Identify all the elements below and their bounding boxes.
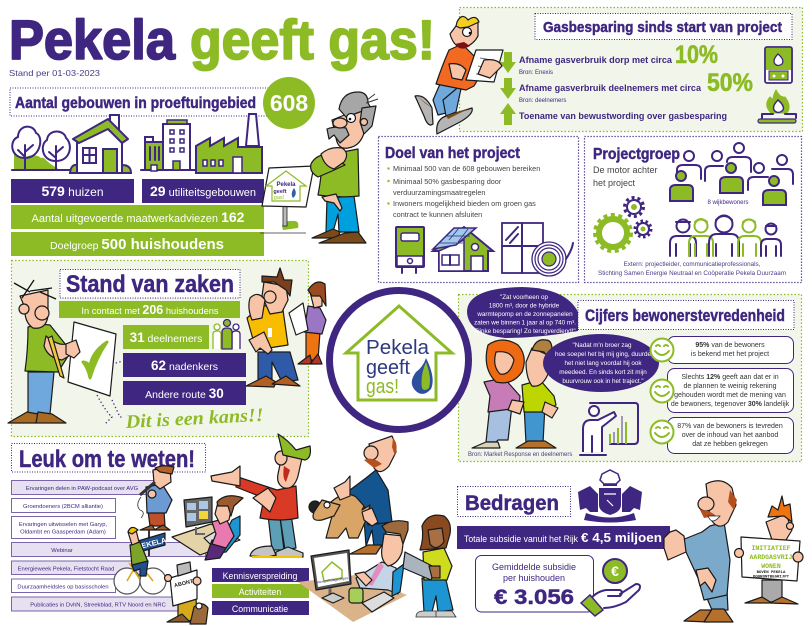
item: webinar: Webinar bbox=[51, 548, 73, 554]
icon: hand with euro coin bbox=[581, 559, 640, 616]
bar: maatwerkadviezen bbox=[11, 205, 264, 229]
goals list: Inwoners mogelijkheid bieden om groen gas bbox=[393, 199, 536, 208]
legend bars: Communicatie bbox=[232, 604, 288, 614]
character: man with newspaper and dog bbox=[164, 562, 208, 624]
character: running man reading paper bbox=[415, 16, 503, 134]
icon: trees and house bbox=[12, 115, 131, 173]
satisfaction 12: de bewoners, tegenover 30% landelijk bbox=[671, 401, 790, 408]
speech bubble 1: Flinke besparing! Zo terugverdiend!" bbox=[474, 328, 576, 335]
character: man with newspaper and dog: ABONT bbox=[174, 579, 195, 589]
caption residents: 8 wijkbewoners bbox=[707, 200, 749, 206]
logo badge: Pekela bbox=[366, 337, 430, 359]
item: groendoeners: Groendoeners (2BCM alliantie) bbox=[23, 504, 103, 510]
saving deelnemers: Afname gasverbruik deelnemers met circa bbox=[519, 83, 702, 94]
bar: doelgroep bbox=[11, 232, 264, 256]
caption external: Stichting Samen Energie Neutraal en Coöperatie Pekela Duurzaam bbox=[598, 270, 786, 277]
icon: house with solar panels bbox=[433, 227, 493, 271]
panel: cijfers bewonerstevredenheid bbox=[458, 287, 802, 462]
panel: bedragen bbox=[457, 470, 670, 616]
bar: huizen: 579 huizen bbox=[41, 183, 104, 199]
bar: nadenkers: 62 nadenkers bbox=[151, 358, 218, 373]
item: webinar bbox=[12, 542, 206, 556]
goals list: Minimaal 50% gasbesparing door bbox=[393, 177, 502, 186]
bar: nadenkers bbox=[123, 353, 246, 377]
character: man holding protest sign: INITIATIEF bbox=[751, 545, 791, 552]
bar: in contact bbox=[59, 301, 240, 318]
saving deelnemers bbox=[519, 69, 753, 104]
heading: Stand van zaken bbox=[66, 271, 234, 298]
bar: totale subsidie: Totale subsidie vanuit het Rijk bbox=[464, 534, 579, 544]
character: man at desk with monitor: www.pekelageeftgas.nl bbox=[316, 576, 352, 584]
saving dorp bbox=[519, 41, 718, 76]
callout: average subsidy: € 3.056 bbox=[494, 586, 574, 609]
character: man with grey cap and sign: Pekela bbox=[276, 182, 296, 188]
character: man holding protest sign bbox=[734, 496, 803, 604]
dotted connectors bbox=[97, 361, 123, 425]
character: man holding protest sign: DOORONTBEGRIJPT bbox=[753, 576, 790, 580]
panel: doel van het project bbox=[378, 136, 578, 282]
speech bubble 2: meedeed. En sinds kort zit mijn bbox=[559, 369, 647, 376]
bar: deelnemers: 31 deelnemers bbox=[130, 330, 202, 345]
callout: average subsidy: per huishouden bbox=[503, 573, 565, 583]
bar: huizen bbox=[11, 179, 134, 203]
satisfaction 95: is bekend met het project bbox=[691, 351, 769, 358]
icon: flame bbox=[758, 90, 796, 123]
panel: aantal gebouwen bbox=[10, 77, 315, 256]
icon: boiler bbox=[765, 47, 792, 83]
character: man holding protest sign: WONEN bbox=[761, 563, 781, 570]
heading: Gasbesparing sinds start van project bbox=[543, 19, 782, 36]
icon: hand with euro coin: € bbox=[611, 563, 619, 579]
satisfaction 12: Slechts 12% geeft aan dat er in bbox=[681, 374, 779, 381]
item: uitwisselen bbox=[12, 516, 116, 538]
arrow up bbox=[500, 103, 516, 125]
title: Pekela bbox=[9, 8, 176, 71]
item: energieweek bbox=[12, 561, 142, 574]
handwritten note: Dit is een kans!! bbox=[124, 405, 264, 433]
character: woman with clipboard bbox=[289, 282, 326, 364]
speech bubble 2: het niet lang voordat hij ook bbox=[564, 360, 642, 367]
satisfaction 95: 95% van de bewoners bbox=[695, 342, 765, 349]
icon: gears bbox=[595, 198, 651, 251]
character: couple bbox=[472, 340, 558, 448]
subheading: De motor achter bbox=[593, 165, 658, 175]
saving deelnemers: Bron: deelnemers bbox=[519, 98, 566, 104]
source line: Bron: Market Response en deelnemers bbox=[468, 452, 572, 458]
satisfaction 12 bbox=[650, 368, 794, 412]
caption external: Extern: projectleider, communicatieprofessionals, bbox=[624, 261, 761, 268]
panel: gasbesparing bbox=[460, 8, 802, 132]
logo badge: geeft bbox=[366, 357, 410, 379]
character: cyclist with sign: PEKELA bbox=[136, 535, 168, 552]
bar: deelnemers bbox=[123, 325, 209, 349]
character: woman at video call bbox=[172, 496, 243, 560]
item: duurzaamheidsles: Duurzaamheidsles op basisscholen bbox=[17, 584, 109, 590]
speech bubble 1: "Zat voorheen op bbox=[500, 294, 549, 301]
character: man holding protest sign: BOVEN PEKELA bbox=[757, 571, 786, 575]
item: publicaties bbox=[12, 597, 182, 611]
character: man holding protest sign: AARDGASVRIJ bbox=[750, 554, 793, 561]
arrow down 1 bbox=[500, 52, 516, 73]
goals list: Minimaal 500 van de 608 gebouwen bereiken bbox=[393, 164, 540, 173]
bar: totale subsidie bbox=[457, 526, 670, 549]
item: publicaties: Publicaties in DvhN, Streekblad, RTV Noord en NRC bbox=[30, 602, 166, 608]
legend bars: Activiteiten bbox=[239, 587, 281, 597]
bar: doelgroep: Doelgroep 500 huishoudens bbox=[50, 236, 224, 253]
heading: Bedragen bbox=[465, 492, 559, 515]
item: podcast bbox=[12, 480, 156, 494]
callout: average subsidy bbox=[476, 556, 594, 612]
character: man with grey cap and sign bbox=[260, 92, 378, 243]
satisfaction 12: de plannen te weinig rekening bbox=[683, 383, 777, 390]
panel: leuk om te weten bbox=[12, 444, 206, 611]
heading bbox=[10, 88, 272, 116]
item: podcast: Ervaringen delen in PAW-podcast over AVG bbox=[26, 486, 139, 492]
caption external bbox=[598, 261, 786, 277]
satisfaction 87: dat ze hebben gekregen bbox=[692, 441, 768, 448]
awareness line: Toename van bewustwording over gasbesparing bbox=[519, 111, 727, 122]
bar: andere route bbox=[123, 381, 246, 405]
speech bubble 2: hoe soepel het bij mij ging, duurde bbox=[555, 351, 651, 358]
saving dorp: Afname gasverbruik dorp met circa bbox=[519, 55, 673, 66]
heading: Aantal gebouwen in proeftuingebied bbox=[15, 95, 256, 112]
panel: projectgroep bbox=[584, 136, 802, 282]
heading: Doel van het project bbox=[385, 145, 520, 162]
item: groendoeners bbox=[12, 498, 116, 512]
badge 608: 608 bbox=[270, 90, 308, 116]
character: man with grey cap and sign: geeft bbox=[273, 189, 287, 195]
item: uitwisselen: Ervaringen uitwisselen met Garyp, bbox=[19, 522, 108, 528]
icon: heat pump meter bbox=[396, 227, 424, 273]
satisfaction 87 bbox=[650, 418, 794, 454]
heading: Projectgroep bbox=[593, 146, 680, 163]
arrow down 2 bbox=[500, 78, 516, 99]
residents icon bbox=[670, 143, 793, 205]
title bbox=[9, 8, 435, 71]
character: bald man with thumbs up bbox=[664, 481, 737, 622]
heading bbox=[578, 300, 794, 330]
speech bubble 2: "Nadat m'n broer zag bbox=[572, 342, 632, 349]
bar: utiliteitsgebouwen: 29 utiliteitsgebouwen bbox=[150, 183, 256, 199]
icon: family bbox=[213, 320, 240, 349]
icon: office and factory bbox=[141, 114, 262, 173]
character: man with green cap bbox=[211, 434, 310, 557]
saving deelnemers: 50% bbox=[707, 69, 753, 97]
saving dorp: Bron: Enexis bbox=[519, 70, 553, 76]
bar: utiliteitsgebouwen bbox=[142, 179, 264, 203]
speech bubble 2 bbox=[543, 334, 659, 392]
legend bars: Kennisverspreiding bbox=[223, 571, 298, 581]
goals list: contract te kunnen afsluiten bbox=[393, 210, 482, 219]
satisfaction 95 bbox=[650, 336, 794, 364]
character: man with headset and microphone bbox=[138, 466, 174, 530]
title: geeft gas! bbox=[190, 8, 435, 71]
bar: maatwerkadviezen: Aantal uitgevoerde maatwerkadviezen 162 bbox=[32, 209, 245, 225]
speech bubble 1: 1800 m³, door de hybride bbox=[489, 302, 560, 310]
character: man with grey cap and sign: gas! bbox=[274, 195, 285, 201]
heading bbox=[535, 14, 792, 40]
character: worried man in yellow shirt bbox=[246, 268, 300, 387]
speech bubble 1 bbox=[467, 287, 578, 338]
callout: average subsidy: Gemiddelde subsidie bbox=[492, 562, 576, 572]
bar: in contact: In contact met 206 huishoudens bbox=[81, 303, 219, 317]
heading: Leuk om te weten! bbox=[19, 446, 195, 473]
bar: andere route: Andere route 30 bbox=[145, 386, 224, 401]
character: man in blue suit with dog bbox=[309, 436, 397, 554]
satisfaction 87: over de inhoud van het aanbod bbox=[682, 432, 778, 439]
goals list: verduurzamingsmaatregelen bbox=[393, 188, 485, 197]
character: cyclist with sign bbox=[114, 527, 168, 594]
speech bubble 1: warmtepomp en de zonnepanelen bbox=[476, 311, 573, 318]
character: man at desk with monitor bbox=[298, 521, 408, 622]
goals list bbox=[387, 164, 540, 219]
subheading: het project bbox=[593, 178, 636, 188]
logo badge: gas! bbox=[366, 376, 399, 398]
icon: window and insulation roll bbox=[502, 223, 573, 276]
panel: stand van zaken bbox=[8, 260, 326, 436]
saving dorp: 10% bbox=[675, 41, 718, 69]
character: man with check sign bbox=[8, 280, 116, 423]
icon: royal coat of arms bbox=[578, 470, 642, 522]
icon: external team bbox=[670, 216, 781, 256]
item: duurzaamheidsles bbox=[12, 579, 116, 592]
speech bubble 1: zaten we binnen 1 jaar al op 740 m³. bbox=[474, 320, 576, 326]
subheading bbox=[593, 165, 658, 188]
badge 608 bbox=[263, 77, 315, 129]
date line: Stand per 01-03-2023 bbox=[9, 68, 100, 78]
bar: totale subsidie: € 4,5 miljoen bbox=[581, 530, 662, 545]
item: energieweek: Energieweek Pekela, Fietstocht Raad bbox=[18, 566, 114, 572]
item: uitwisselen: Oldambt en Gaasperdam (Adam) bbox=[20, 530, 106, 536]
satisfaction 12: gehouden wordt met de mening van bbox=[674, 392, 786, 399]
character: woman with tablet bbox=[403, 515, 456, 617]
legend bars bbox=[212, 568, 309, 615]
icon: presenter with chart bbox=[580, 403, 638, 455]
satisfaction 87: 87% van de bewoners is tevreden bbox=[677, 423, 783, 430]
heading bbox=[458, 486, 570, 516]
logo badge bbox=[330, 290, 468, 430]
speech bubble 2: buurvrouw ook in het traject." bbox=[562, 378, 644, 385]
